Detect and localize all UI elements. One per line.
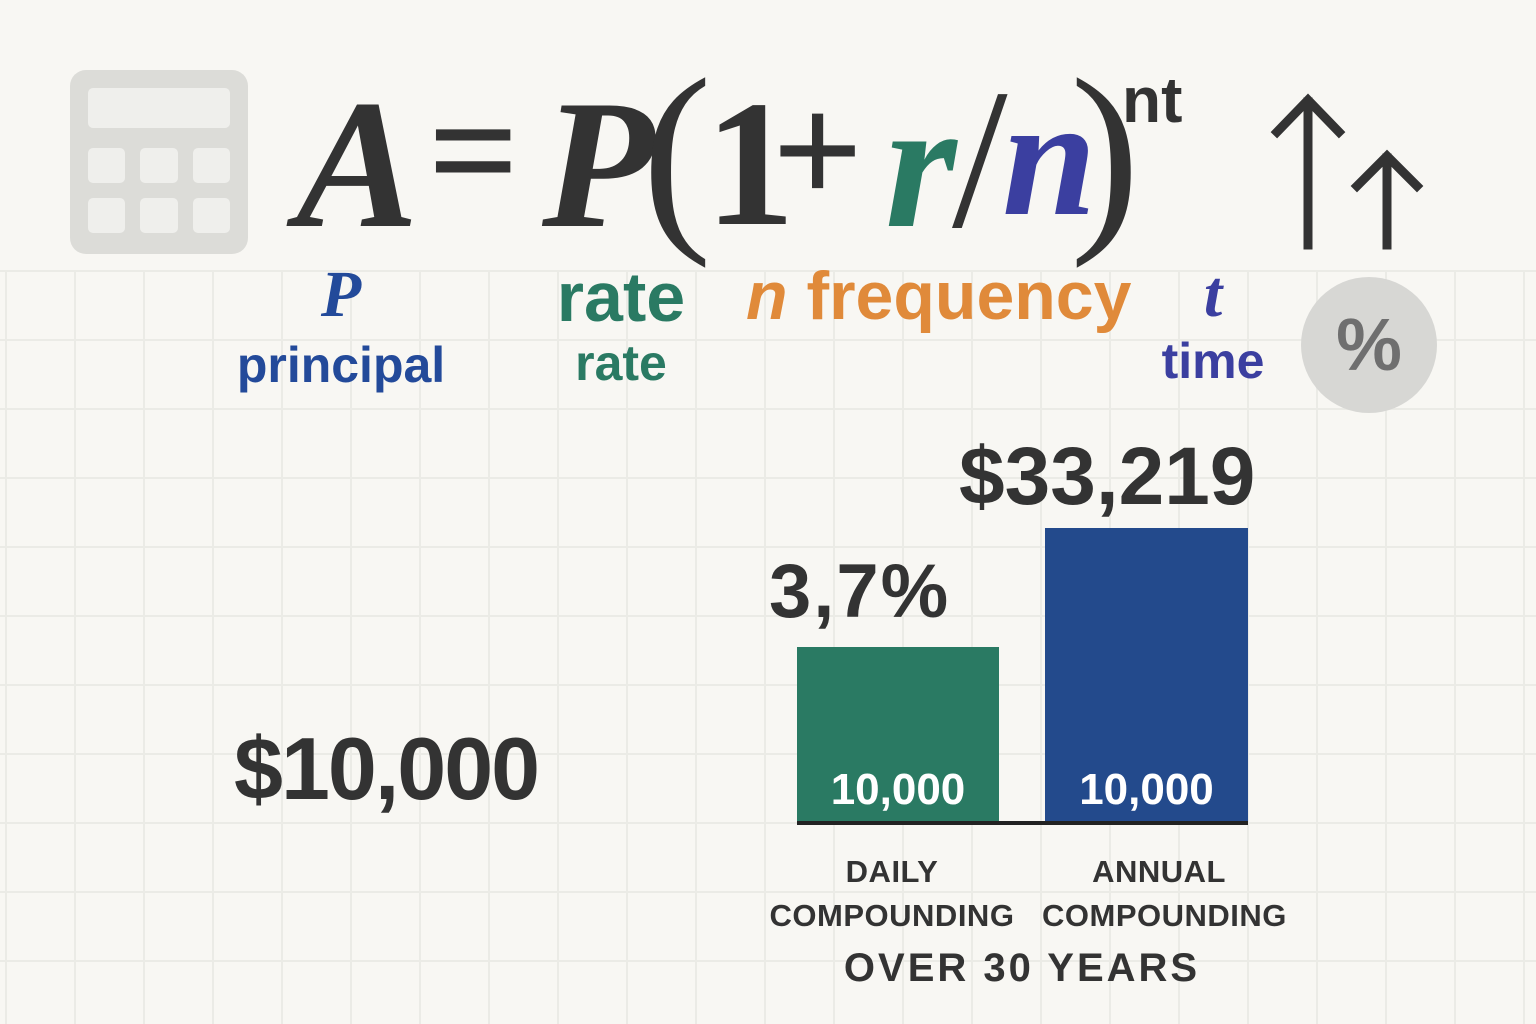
formula: / [952,49,1008,270]
icon: calculator [70,70,248,254]
label: time: time [1162,333,1264,389]
formula: A [296,62,419,266]
formula [286,37,1182,270]
label: annual compounding: ANNUAL [1092,854,1226,889]
label: time [1162,258,1264,389]
principal amount: $10,000 [234,719,538,818]
label: principal [237,258,445,393]
formula: n [1002,63,1097,251]
formula: P [542,62,654,266]
bar: daily [797,647,999,822]
label: rate: rate [575,335,667,391]
value: 3,7%: 3,7% [769,549,950,634]
icon: percent circle: % [1336,303,1402,386]
formula: = [428,61,519,239]
icon: up arrows [1270,94,1424,250]
label: annual compounding [1042,854,1287,933]
formula: + [772,61,863,239]
label: annual compounding: COMPOUNDING [1042,898,1287,933]
value: 33,219: $33,219 [959,431,1255,522]
bar: annual [1045,528,1248,822]
bar: annual: 10,000 [1079,765,1214,814]
formula: 1 [705,64,795,263]
icon: percent circle [1301,277,1437,413]
formula: ( [642,37,712,269]
label: daily compounding: DAILY [846,854,938,889]
formula: nt [1122,64,1182,136]
bar: daily: 10,000 [831,765,965,814]
label: over 30 years: OVER 30 YEARS [844,946,1200,990]
label: time: t [1204,258,1222,331]
label: principal: P [321,258,361,331]
label: rate: rate [557,258,685,336]
label: principal: principal [237,337,445,393]
label: daily compounding [770,854,1014,933]
bar chart [769,431,1287,990]
formula: ) [1070,37,1140,269]
label: rate [557,258,685,391]
label: n frequency: n frequency [746,258,1131,334]
label: daily compounding: COMPOUNDING [770,898,1014,933]
formula: r [885,62,957,266]
